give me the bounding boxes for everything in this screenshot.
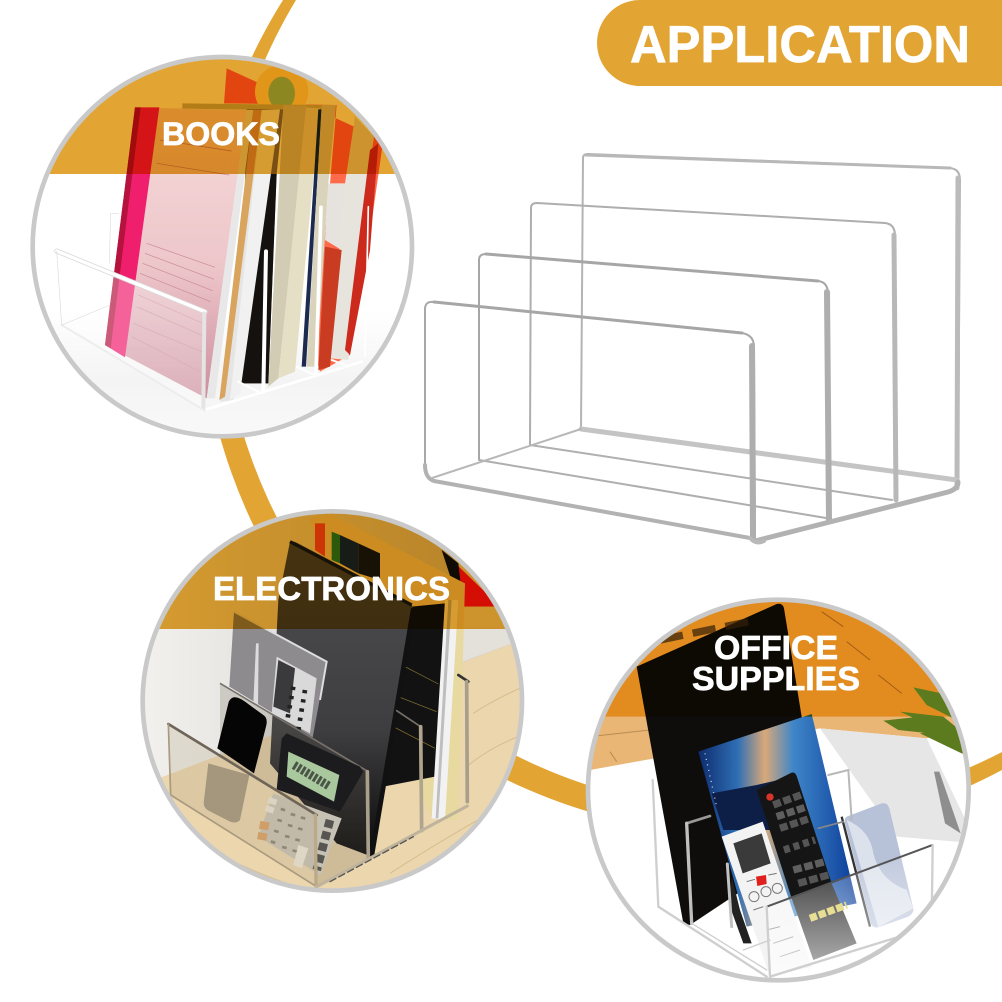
clear dividers bbox=[105, 277, 202, 396]
metal card bbox=[229, 612, 327, 737]
leaves bbox=[884, 687, 963, 754]
clear stand bbox=[934, 772, 961, 833]
orange band overlay bbox=[50, 59, 395, 174]
circle panel: electronics bbox=[130, 500, 530, 900]
orange band overlay bbox=[605, 602, 950, 717]
poster bbox=[442, 550, 500, 607]
main product: clear acrylic four-slot organizer bbox=[425, 154, 960, 542]
title banner: APPLICATION bbox=[597, 0, 1002, 86]
blue screen tablet bbox=[698, 714, 857, 927]
label: OFFICE SUPPLIES: OFFICE bbox=[714, 629, 838, 666]
phone bbox=[845, 803, 913, 927]
phone bbox=[217, 697, 267, 773]
orange band overlay bbox=[160, 514, 506, 629]
title banner: APPLICATION: APPLICATION bbox=[630, 16, 970, 74]
magazines bbox=[308, 514, 465, 820]
label: ELECTRONICS: ELECTRONICS bbox=[213, 570, 450, 607]
ornate red back book bbox=[224, 68, 383, 372]
label: OFFICE SUPPLIES: SUPPLIES bbox=[692, 660, 860, 697]
label: OFFICE SUPPLIES bbox=[692, 629, 860, 697]
clear acrylic front panel bbox=[768, 858, 914, 960]
second smoked divider bbox=[220, 683, 368, 887]
black TV remote bbox=[757, 772, 857, 960]
circle panel: office supplies bbox=[580, 590, 980, 981]
smoked acrylic dividers bbox=[168, 724, 317, 887]
circle panel: books bbox=[20, 50, 420, 450]
main pink notebook bbox=[105, 107, 247, 398]
decorative background arc bbox=[200, 0, 1002, 835]
big black tablet bbox=[636, 604, 802, 925]
calculator bbox=[277, 733, 363, 812]
white AC remote bbox=[722, 822, 812, 977]
stacked books bbox=[240, 109, 283, 383]
tablet bbox=[270, 541, 413, 857]
label: BOOKS: BOOKS bbox=[162, 116, 280, 152]
